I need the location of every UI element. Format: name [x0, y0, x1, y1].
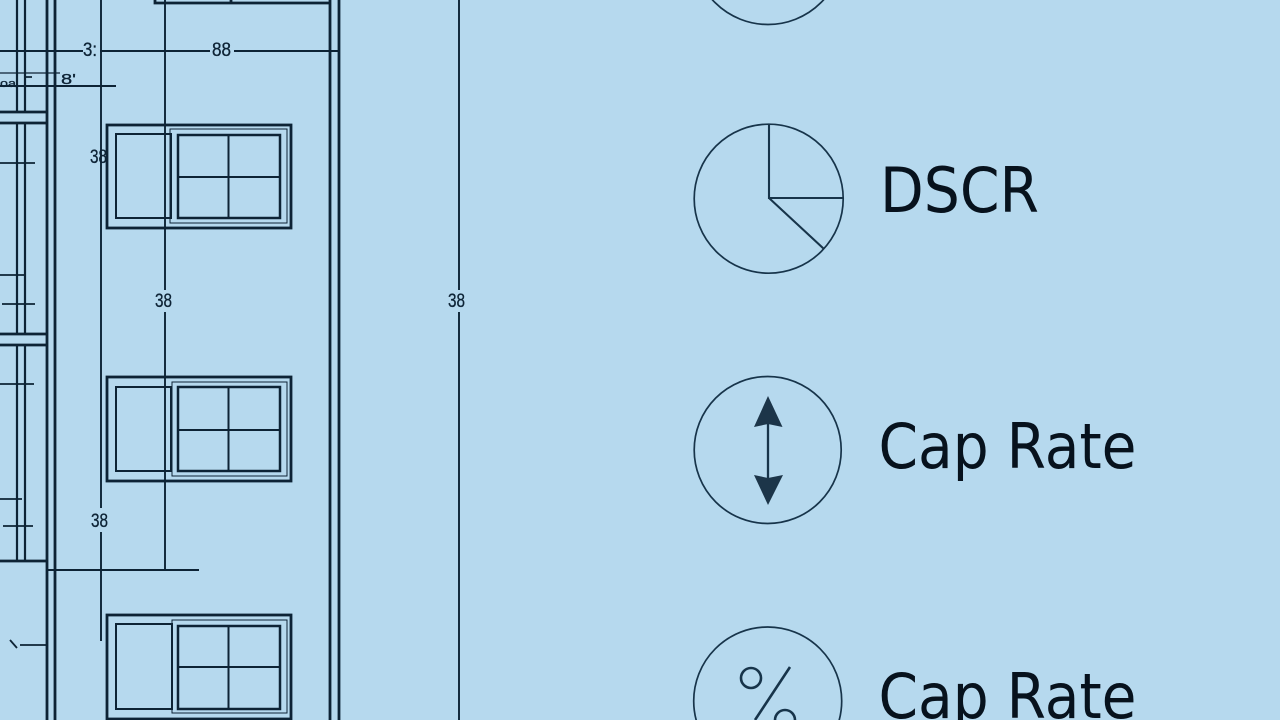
metric: Cap Rate percent	[694, 627, 1136, 720]
panel: metrics list	[693, 0, 1136, 720]
dimension labels	[0, 40, 465, 532]
dimension labels: 88	[212, 40, 231, 61]
dimension labels: oa	[0, 78, 17, 90]
dimension labels: 3:	[83, 40, 97, 61]
icon: vertical double arrow	[694, 376, 841, 524]
wall tick marks	[0, 77, 47, 648]
dimension lines	[0, 0, 459, 720]
dimension labels: 8'	[61, 71, 76, 88]
label: Cap Rate: Cap Rate	[878, 410, 1136, 483]
label: DSCR: DSCR	[880, 154, 1039, 227]
dimension labels: 38	[448, 291, 465, 312]
icon: top circle	[693, 0, 843, 24]
building walls	[0, 0, 339, 720]
dimension labels: 38	[91, 511, 108, 532]
icon: pie chart	[694, 124, 843, 273]
dimension labels: 38	[155, 291, 172, 312]
window 1	[107, 125, 291, 228]
window 3	[107, 615, 291, 719]
metric: Cap Rate arrows	[694, 376, 1136, 524]
dimension labels: 38	[90, 147, 107, 168]
metric: DSCR	[694, 124, 1039, 273]
window 2	[107, 377, 291, 481]
panel: building blueprint	[0, 0, 465, 720]
top window edge	[155, 0, 330, 3]
icon: percent	[694, 627, 842, 720]
